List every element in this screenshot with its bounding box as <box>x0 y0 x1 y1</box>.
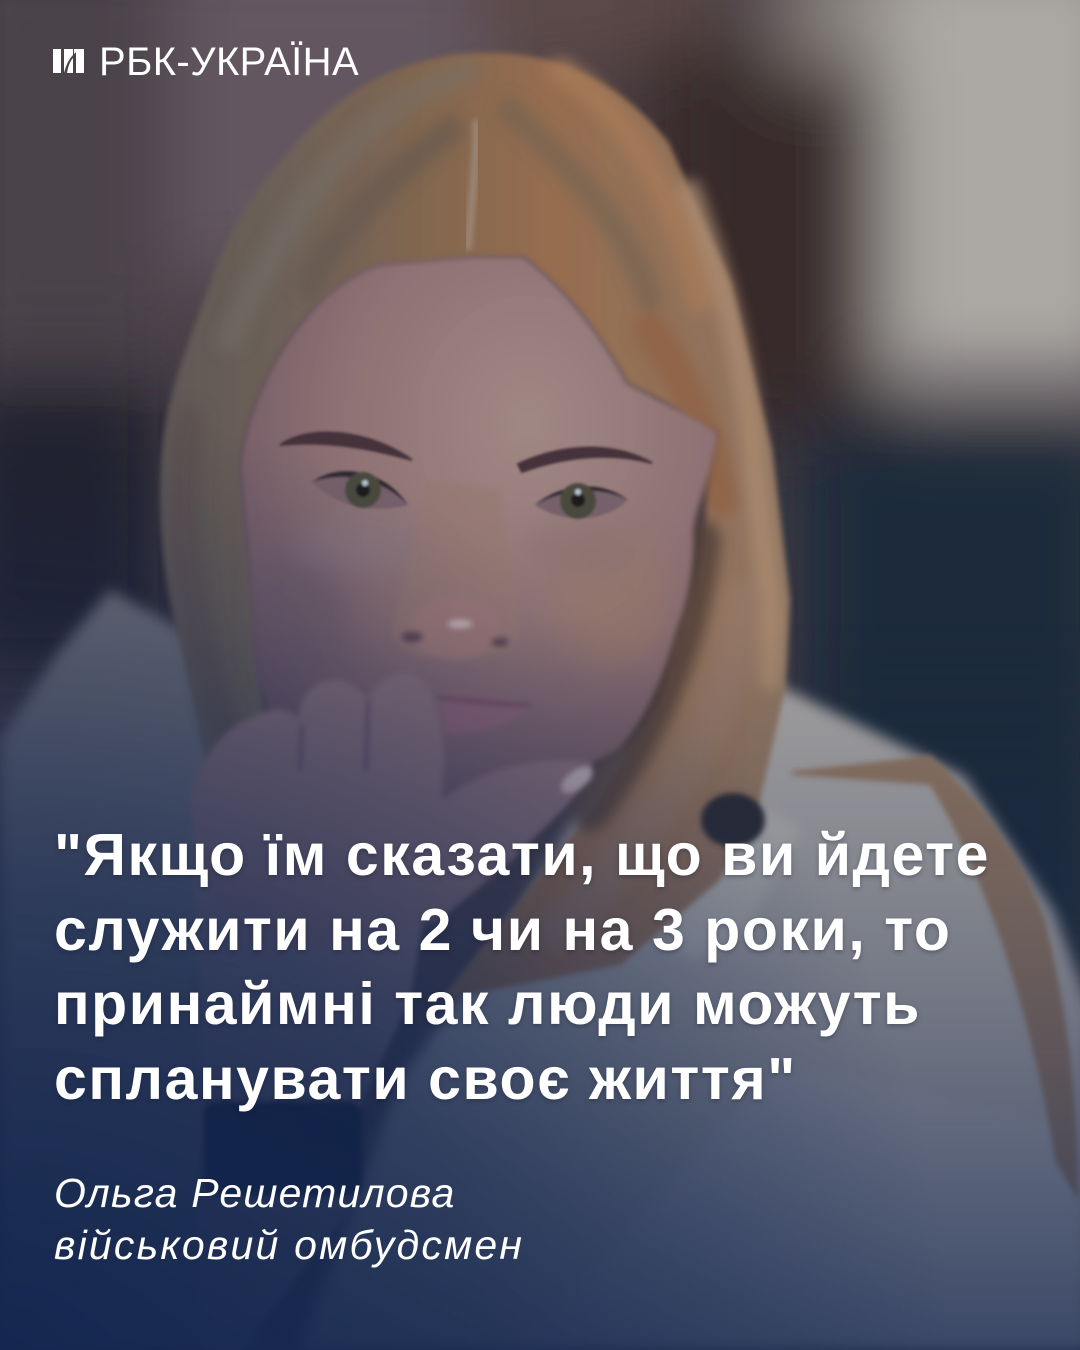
right shoulder hair strand <box>792 755 1078 1200</box>
logo: РБК-Україна <box>53 40 359 84</box>
quote text: спланувати своє життя" <box>54 1046 797 1112</box>
facial features <box>280 433 652 519</box>
quote text: "Якщо їм сказати, що ви йдете <box>54 822 990 888</box>
hair <box>160 53 790 1000</box>
face <box>240 257 718 810</box>
quote text: принаймні так люди можуть <box>54 971 921 1037</box>
attribution: військовий омбудсмен <box>54 1222 524 1268</box>
attribution <box>54 1170 524 1268</box>
jacket button <box>701 793 765 847</box>
jacket <box>0 590 1080 1350</box>
logo wordmark: РБК-УКРАЇНА <box>99 40 359 84</box>
quote text <box>54 822 990 1112</box>
logo icon <box>53 49 84 73</box>
arm and watch <box>193 790 445 1350</box>
quote text: служити на 2 чи на 3 роки, то <box>54 897 951 963</box>
hand <box>190 673 597 960</box>
attribution: Ольга Решетилова <box>54 1170 456 1216</box>
